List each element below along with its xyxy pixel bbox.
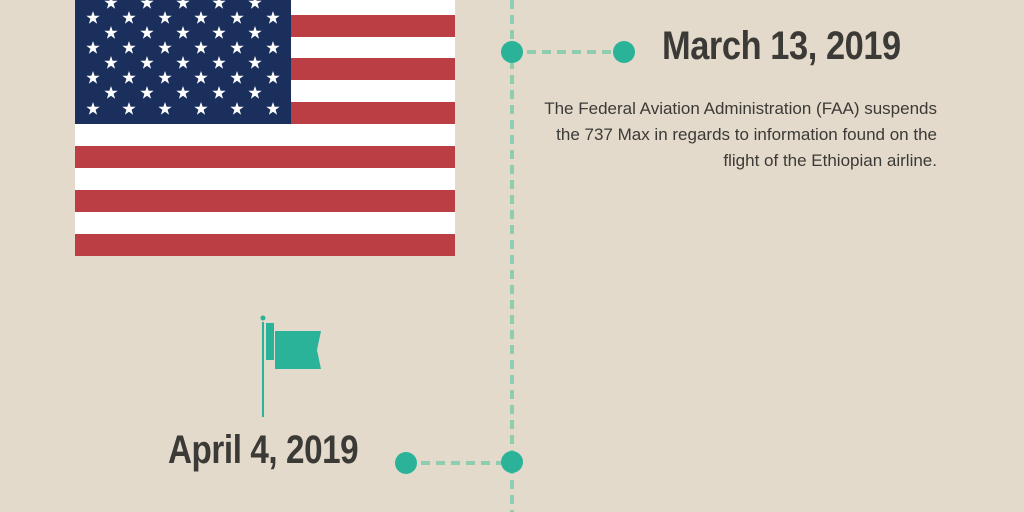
text block: FAA suspension bbox=[544, 99, 937, 170]
text block: FAA suspension: the 737 Max in regards to information found on the bbox=[556, 125, 937, 144]
US flag bbox=[75, 0, 455, 256]
heading: March 13, 2019: March 13, 2019 bbox=[662, 24, 901, 68]
icon: flag bbox=[260, 316, 321, 417]
text block: FAA suspension: The Federal Aviation Administration (FAA) suspends bbox=[544, 99, 937, 118]
heading: April 4, 2019: April 4, 2019 bbox=[168, 428, 358, 472]
text block: FAA suspension: flight of the Ethiopian airline. bbox=[723, 151, 937, 170]
